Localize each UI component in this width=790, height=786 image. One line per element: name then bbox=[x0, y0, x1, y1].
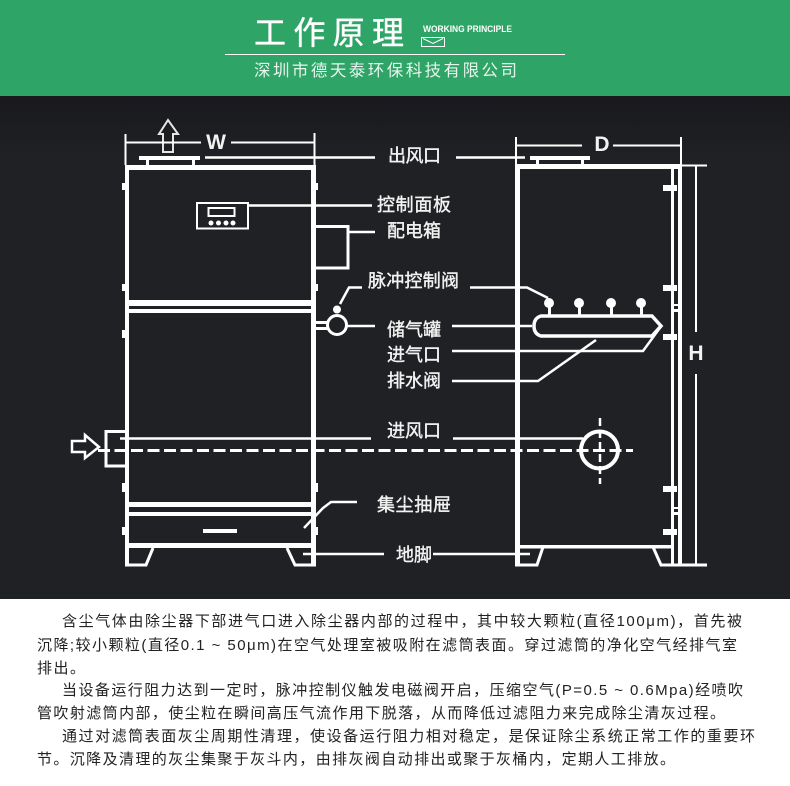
english subtitle: WORKING PRINCIPLE bbox=[423, 24, 512, 34]
description text: 当设备运行阻力达到一定时，脉冲控制仪触发电磁阀开启，压缩空气(P=0.5 ~ 0.6Mpa)经喷吹 bbox=[62, 682, 743, 699]
header divider bbox=[225, 54, 565, 55]
cabinet walls and bands bbox=[122, 165, 318, 565]
label: outlet: 出风口 bbox=[388, 146, 441, 166]
description text: 管吹射滤筒内部，使尘粒在瞬间高压气流作用下脱落，从而降低过滤阻力来完成除尘清灰过程。 bbox=[37, 705, 725, 722]
description text: 含尘气体由除尘器下部进气口进入除尘器内部的过程中，其中较大颗粒(直径100μm)，首先被 bbox=[62, 612, 742, 630]
feet bbox=[125, 548, 316, 565]
label D: D bbox=[594, 133, 610, 156]
side feet bbox=[515, 547, 707, 565]
title: 工作原理 bbox=[254, 8, 404, 54]
company name: 深圳市德天泰环保科技有限公司 bbox=[254, 57, 517, 81]
description text: 沉降;较小颗粒(直径0.1 ~ 50μm)在空气处理室被吸附在滤筒表面。穿过滤筒的净化空气经排气室 bbox=[37, 636, 737, 654]
icon: envelope bbox=[422, 38, 444, 46]
diagram panel bbox=[0, 96, 790, 599]
side walls bbox=[515, 164, 682, 565]
label: air tank: 储气罐 bbox=[387, 320, 441, 340]
label W: W bbox=[206, 131, 226, 154]
description text: 排出。 bbox=[37, 660, 85, 677]
diagram labels bbox=[368, 146, 459, 565]
side flange bbox=[530, 156, 590, 165]
label: wind inlet: 进风口 bbox=[387, 421, 441, 441]
icon: outlet arrow bbox=[159, 120, 178, 152]
diagram letters bbox=[206, 131, 704, 365]
pulse valves bbox=[544, 298, 646, 316]
front view cabinet bbox=[72, 120, 348, 565]
manifold bbox=[534, 316, 661, 336]
label: drain valve: 排水阀 bbox=[387, 371, 441, 391]
icon: inlet arrow bbox=[72, 435, 99, 458]
label: air inlet: 进气口 bbox=[387, 345, 441, 365]
electrical box bbox=[316, 226, 348, 268]
label: electrical box: 配电箱 bbox=[387, 221, 441, 241]
control panel bbox=[197, 203, 248, 228]
crosshair bbox=[599, 418, 601, 484]
top flange bbox=[139, 156, 200, 165]
description text: 节。沉降及清理的灰尘集聚于灰斗内，由排灰阀自动排出或聚于灰桶内，定期人工排放。 bbox=[37, 751, 675, 768]
inlet centre line bbox=[98, 449, 633, 452]
label: control panel: 控制面板 bbox=[377, 195, 451, 215]
label: feet: 地脚 bbox=[396, 545, 432, 565]
leader lines bbox=[98, 158, 662, 554]
label: dust drawer: 集尘抽屉 bbox=[377, 495, 451, 515]
description text: 通过对滤筒表面灰尘周期性清理，使设备运行阻力相对稳定，是保证除尘系统正常工作的重要环 bbox=[62, 728, 755, 745]
side view cabinet bbox=[515, 137, 707, 565]
header band bbox=[0, 0, 790, 96]
description text bbox=[37, 612, 755, 768]
width dimension bbox=[126, 133, 314, 165]
label H: H bbox=[688, 342, 704, 365]
inlet circle bbox=[581, 432, 618, 468]
depth dimension bbox=[516, 137, 681, 165]
label: pulse valve: 脉冲控制阀 bbox=[368, 271, 459, 291]
air tank bbox=[316, 307, 346, 334]
height dimension bbox=[682, 166, 707, 565]
inlet box bbox=[106, 432, 125, 466]
